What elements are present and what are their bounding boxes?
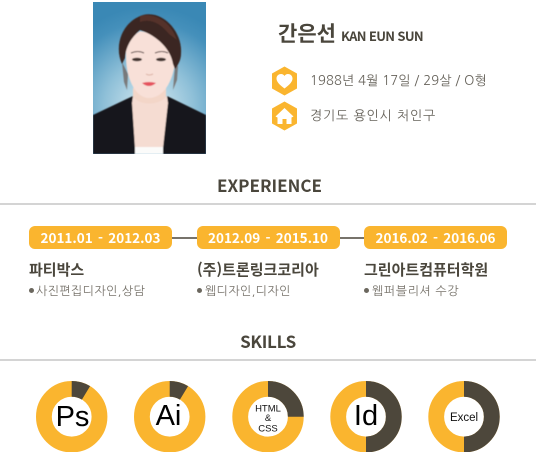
description 3 [364,285,459,297]
date pill 2: 2012.09 - 2015.10 [208,227,328,247]
donut: HTML and CSS: CSS [258,424,278,434]
donut: Excel [436,389,492,445]
icon: home hexagon [272,102,297,130]
description text 1: 사진편집디자인,상담 [36,285,145,297]
donut: HTML and CSS: & [265,413,272,424]
donut: Photoshop [44,389,100,445]
description 1 [29,285,145,297]
icon: heart hexagon [272,66,297,96]
name heading [278,18,423,48]
donut: Excel: Excel [450,412,478,424]
timeline connector 2 [339,237,364,238]
donut: HTML and CSS: HTML [255,404,281,414]
skills donut charts [36,381,500,452]
donut: InDesign: Id [354,400,378,432]
heading: skills: SKILLS [240,328,296,353]
description text 2: 웹디자인,디자인 [205,285,291,297]
bullet 2 [197,288,202,293]
donut: Illustrator [142,389,198,445]
date pill 1: 2011.01 - 2012.03 [41,227,160,247]
donut: Photoshop: Ps [56,401,89,433]
bullet 1 [29,288,34,293]
address text: 경기도 용인시 처인구 [310,109,436,122]
donut: Illustrator: Ai [156,400,181,432]
description text 3: 웹퍼블리셔 수강 [372,285,459,297]
timeline connector 1 [172,237,197,238]
date pill 3: 2016.02 - 2016.06 [376,227,495,247]
company 3: 그린아트컴퓨터학원 [364,259,488,280]
name: Latin: KAN EUN SUN [341,26,423,45]
photo: portrait [93,2,206,154]
company 1: 파티박스 [29,259,84,280]
heading: experience: EXPERIENCE [217,172,322,197]
birth info text: 1988년 4월 17일 / 29살 / O형 [310,74,487,87]
bullet 3 [364,288,369,293]
donut: HTML and CSS [240,389,296,445]
donut: InDesign [338,389,394,445]
name: Korean: 간은선 [278,18,336,48]
company 2: (주)트론링크코리아 [197,259,319,280]
description 2 [197,285,291,297]
